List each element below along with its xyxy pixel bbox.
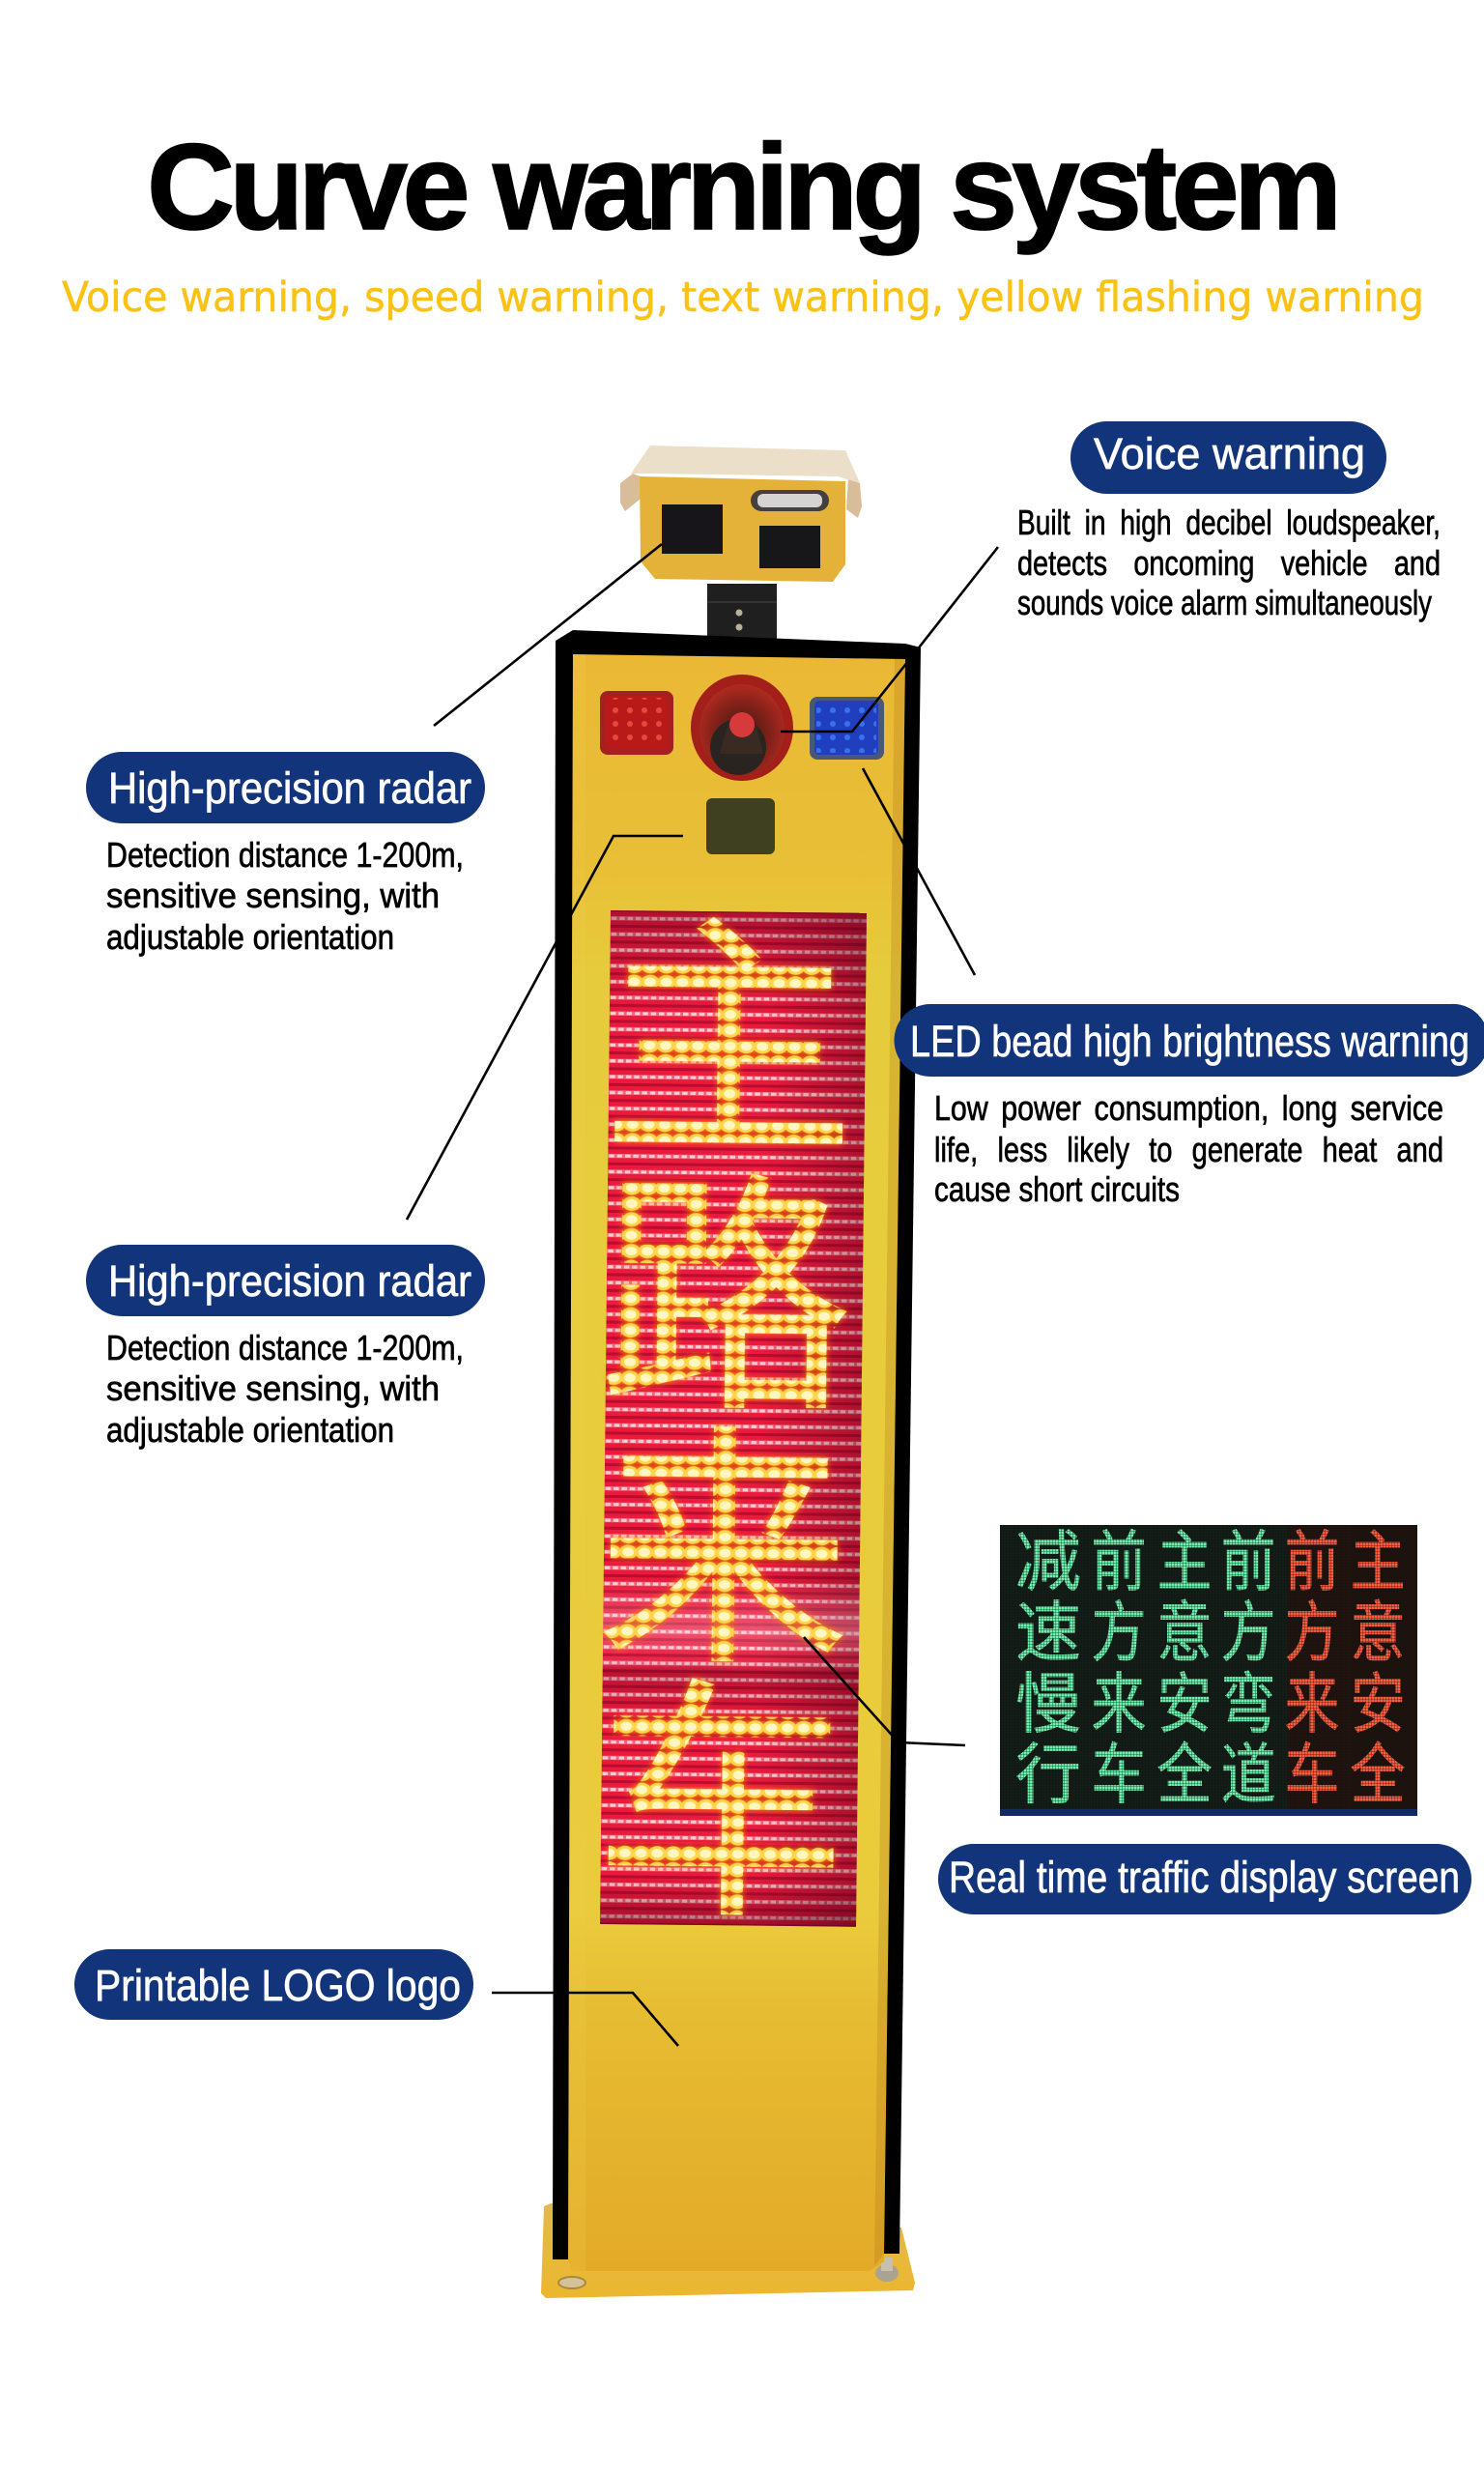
green messages: 慢 [1015, 1651, 1081, 1746]
green messages: 行 [1015, 1721, 1081, 1817]
radar window [706, 798, 775, 854]
green messages: 速 [1015, 1579, 1081, 1675]
green messages: 安 [1156, 1652, 1213, 1747]
green messages: 道 [1220, 1722, 1276, 1818]
callout: high-precision radar 2 [86, 1245, 485, 1450]
red messages: 意 [1350, 1580, 1406, 1676]
pill heading [895, 1004, 1484, 1077]
description [1017, 503, 1441, 622]
callout: LED bead [895, 1004, 1484, 1209]
description: adjustable orientation [106, 917, 394, 957]
callout: real time traffic display screen [938, 1844, 1471, 1914]
traffic display screen photo [1000, 1509, 1417, 1818]
green messages: 主 [1156, 1510, 1213, 1605]
description [106, 835, 464, 957]
cabinet black frame [553, 630, 921, 2259]
base plate [541, 2203, 915, 2298]
red messages: 全 [1350, 1722, 1406, 1818]
green messages: 方 [1091, 1580, 1147, 1676]
green messages: 方 [1220, 1580, 1276, 1676]
green messages [1015, 1509, 1276, 1818]
green messages: 减 [1015, 1509, 1081, 1604]
pill heading [1070, 421, 1386, 494]
leader line: logo [492, 1993, 678, 2046]
red messages: 车 [1284, 1722, 1340, 1818]
blue warning light [810, 697, 884, 760]
leader line: voice warning [781, 547, 998, 732]
description: sensitive sensing, with [106, 876, 440, 915]
mounting bracket [707, 584, 777, 644]
title: Curve warning system [147, 119, 1342, 255]
callout: voice warning [1017, 421, 1441, 622]
camera LED strip [751, 490, 829, 511]
leader line: LED bead [863, 768, 975, 975]
horn speaker [691, 675, 793, 781]
description [106, 1328, 464, 1450]
description: Detection distance 1-200m, [106, 1328, 464, 1367]
cabinet yellow face [568, 654, 905, 2271]
red messages: 安 [1350, 1652, 1406, 1747]
green messages: 车 [1091, 1722, 1147, 1818]
callout: high-precision radar 1 [86, 752, 485, 957]
red messages: 前 [1284, 1510, 1340, 1605]
callout: printable logo [74, 1949, 473, 2020]
description: sensitive sensing, with [106, 1368, 440, 1408]
subtitle: Voice warning, speed warning, text warning, yellow flashing warning [62, 273, 1424, 322]
LED characters: 车 [593, 1599, 850, 1969]
device: warning cabinet [541, 446, 921, 2298]
description [934, 1088, 1443, 1209]
red messages: 方 [1284, 1580, 1340, 1676]
description: cause short circuits [934, 1169, 1180, 1209]
description: adjustable orientation [106, 1410, 394, 1450]
LED characters [593, 836, 858, 1969]
red messages: 来 [1284, 1652, 1340, 1747]
green messages: 弯 [1220, 1652, 1276, 1747]
pill heading: High-precision radar [108, 1256, 471, 1306]
green messages: 前 [1091, 1510, 1147, 1605]
red messages [1284, 1510, 1406, 1818]
camera body [640, 476, 845, 582]
red warning light [600, 691, 673, 755]
pill heading: Voice warning [1094, 429, 1365, 478]
pill heading: High-precision radar [108, 763, 471, 813]
description: Detection distance 1-200m, [106, 835, 464, 875]
callout: printable logo: Printable LOGO logo [95, 1961, 461, 2010]
leader line: radar window [407, 836, 683, 1220]
camera radar unit [620, 446, 862, 644]
green messages: 前 [1220, 1510, 1276, 1605]
LED dot matrix screen [593, 836, 868, 1969]
camera windows [662, 504, 820, 568]
leader line: display screen [804, 1637, 965, 1745]
leader line: radar top [434, 544, 662, 726]
hood [620, 446, 862, 518]
pill heading [86, 1245, 485, 1316]
pill heading [86, 752, 485, 823]
green messages: 来 [1091, 1652, 1147, 1747]
LED characters: 主 [601, 836, 858, 1205]
red messages: 主 [1350, 1510, 1406, 1605]
LED characters: 来 [595, 1346, 852, 1715]
green messages: 意 [1156, 1580, 1213, 1676]
LED characters: 路 [598, 1093, 855, 1462]
green messages: 全 [1156, 1722, 1213, 1818]
